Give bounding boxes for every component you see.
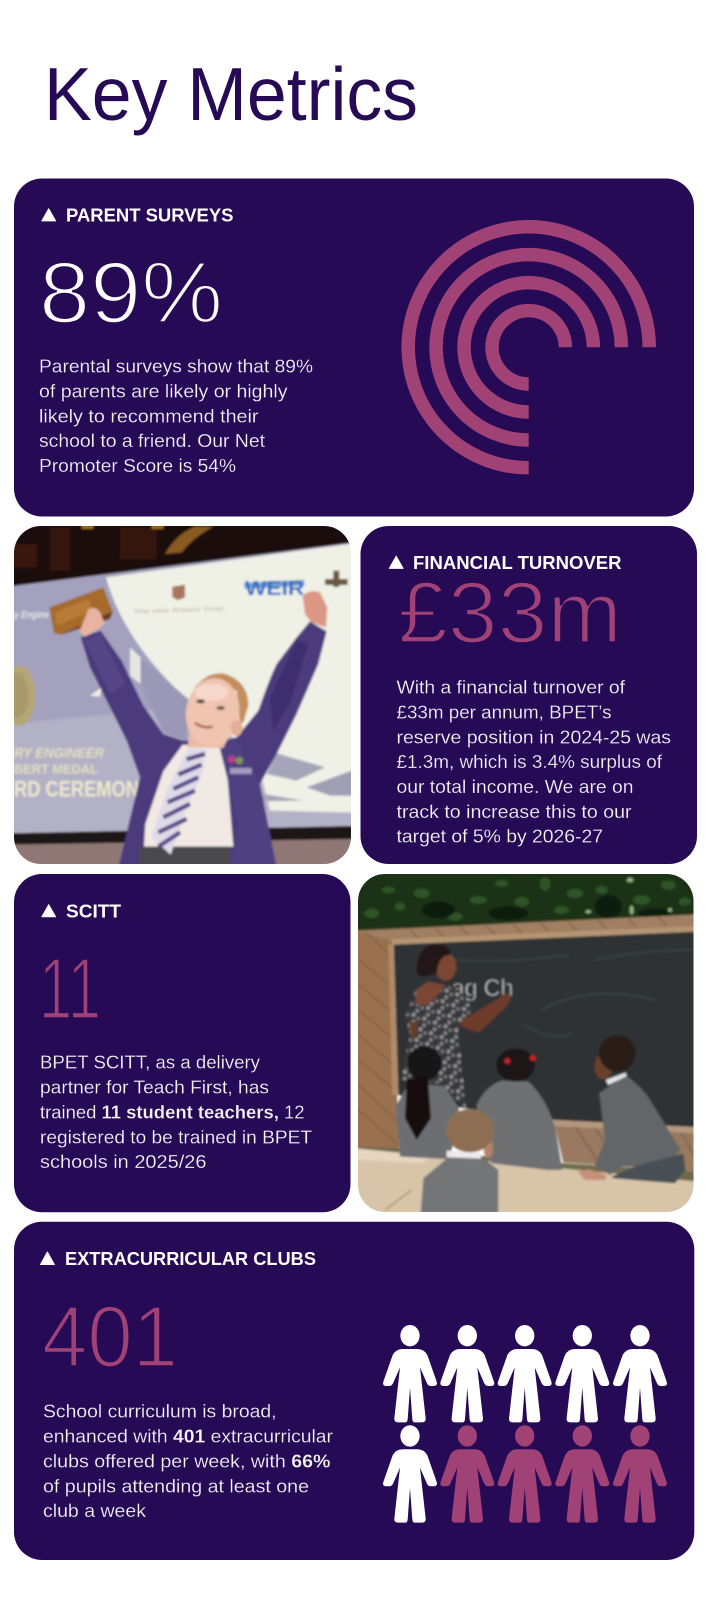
text: SCITT description: trained 11 student teachers, 12: [40, 1101, 304, 1122]
text: financial description: target of 5% by 2026-27: [396, 826, 603, 847]
girl with ponytail: [396, 1083, 459, 1159]
text: SCITT description: BPET SCITT, as a delivery: [40, 1051, 261, 1072]
heading: parent surveys: PARENT SURVEYS: [66, 204, 234, 225]
boy in the front: [421, 1157, 498, 1213]
text: clubs description: club a week: [43, 1500, 147, 1521]
chalk writing: ag Ch: [452, 975, 513, 1002]
text: financial description: £33m per annum, BPET’s: [396, 701, 612, 722]
text: clubs description: enhanced with 401 extracurricular: [43, 1426, 333, 1447]
shirt: [144, 745, 233, 847]
hands and trophy: [49, 587, 113, 635]
boy on the right: [595, 1075, 681, 1175]
neck: [187, 734, 230, 748]
text: financial description: £1.3m, which is 3.4% surplus of: [396, 751, 663, 772]
text: financial description: With a financial turnover of: [396, 676, 626, 697]
text: SCITT description: registered to be trained in BPET: [40, 1126, 312, 1147]
text: clubs description: clubs offered per week, with 66%: [43, 1450, 330, 1471]
badge: [228, 756, 235, 763]
photo: pupil holding trophy on stage: BERT MEDAL: [14, 761, 98, 776]
teacher: [401, 986, 473, 1108]
icon: triangle bullet: [40, 1252, 54, 1264]
text: clubs description: of pupils attending at least one: [43, 1475, 309, 1496]
icon: triangle bullet: [42, 209, 56, 221]
text: parent surveys description: Parental surveys show that 89%: [39, 356, 313, 376]
title: Key Metrics: [44, 52, 418, 136]
text: parent surveys description: of parents are likely or highly: [39, 380, 288, 402]
left arm and cardigan: [81, 621, 327, 867]
heading: financial turnover: FINANCIAL TURNOVER: [413, 552, 622, 573]
text: parent surveys description: [39, 356, 313, 476]
heading: extracurricular clubs: EXTRACURRICULAR CLUBS: [65, 1248, 316, 1269]
girl in the centre: [477, 1081, 562, 1170]
panel: SCITT: [14, 874, 350, 1212]
photo: pupil holding trophy on stage: y Engine: [13, 610, 49, 621]
statistic: 401: 401: [42, 1289, 178, 1386]
photo: pupil holding trophy on stage: The Hon Robert Trust: [133, 606, 224, 615]
tie: [152, 748, 207, 855]
icon: triangle bullet: [42, 905, 56, 917]
text: financial description: our total income. We are on: [396, 776, 634, 797]
photo: pupil holding trophy on stage: [3, 524, 357, 867]
text: financial description: reserve position in 2024-25 was: [396, 726, 671, 747]
statistic: 11: 11: [39, 941, 101, 1038]
text: financial description: [396, 676, 671, 847]
text: SCITT description: partner for Teach First, has: [40, 1076, 269, 1097]
text: parent surveys description: likely to recommend their: [39, 405, 258, 426]
text: SCITT description: [40, 1051, 312, 1172]
statistic: 89%: 89%: [39, 244, 223, 342]
heading: SCITT: SCITT: [66, 900, 122, 921]
photo: pupil holding trophy on stage: RY ENGINEER: [14, 744, 104, 760]
face: [184, 676, 241, 746]
text: SCITT description: schools in 2025/26: [40, 1151, 206, 1172]
hair: [192, 673, 248, 724]
text: financial description: track to increase this to our: [396, 801, 632, 822]
pictogram: pupils attending clubs: [383, 1325, 667, 1523]
text: parent surveys description: Promoter Score is 54%: [39, 455, 236, 476]
statistic: £33m: £33m: [398, 564, 622, 661]
text: clubs description: School curriculum is broad,: [43, 1401, 276, 1422]
graphic: concentric arcs: [408, 227, 649, 468]
dark skirt: [139, 847, 231, 867]
photo: teacher writing on chalkboard with pupils: [355, 870, 698, 1213]
icon: triangle bullet: [389, 556, 403, 568]
panel: financial turnover: [360, 526, 697, 864]
text: parent surveys description: school to a friend. Our Net: [39, 430, 265, 451]
text: clubs description: [43, 1401, 333, 1521]
panel: parent surveys: [14, 178, 694, 516]
panel: extracurricular clubs: [14, 1222, 694, 1560]
photo: pupil holding trophy on stage: RD CEREMON: [14, 777, 139, 802]
photo: pupil holding trophy on stage: WEIR: [245, 577, 304, 600]
